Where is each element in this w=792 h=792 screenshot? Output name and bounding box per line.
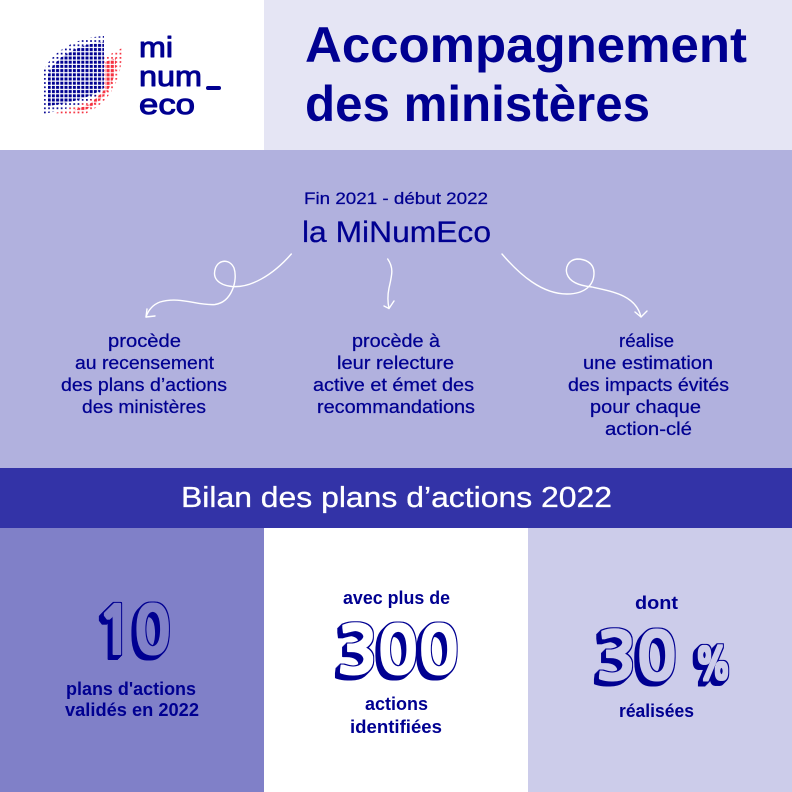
heading: la MiNumEco: la MiNumEco <box>302 216 491 249</box>
icon: dotted leaf <box>43 36 122 114</box>
caption: avec plus de: avec plus de <box>343 588 450 608</box>
arrow: middle <box>384 259 394 308</box>
caption: actions identifiées: identifiées <box>350 717 442 737</box>
date line: Fin 2021 - début 2022 <box>304 189 488 208</box>
panel: process background <box>0 150 792 468</box>
panel: results band <box>0 468 792 528</box>
panel: 10 plans background <box>0 528 264 792</box>
logo wordmark: num <box>139 61 202 93</box>
number: percent sign: % <box>695 643 731 687</box>
number: 300: 300 <box>337 618 459 684</box>
logo: MiNumEco <box>43 32 221 121</box>
text block: census <box>61 331 227 417</box>
caption: actions identifiées <box>350 694 442 737</box>
logo wordmark: mi <box>139 32 173 64</box>
text block: estimation: des impacts évités <box>568 375 729 395</box>
number: 30: 30 <box>596 624 677 690</box>
caption: plans d'actions: plans d'actions <box>66 679 196 699</box>
arrow: right <box>502 254 647 317</box>
logo wordmark <box>139 32 221 121</box>
text block: census: des plans d’actions <box>61 375 227 395</box>
panel: 300 actions background <box>264 528 528 792</box>
panel: 30 percent background <box>528 528 792 792</box>
text block: review: leur relecture <box>337 353 454 373</box>
caption: actions identifiées: actions <box>365 694 428 714</box>
text block: estimation: réalise <box>619 331 674 351</box>
title: Accompagnement <box>305 17 747 73</box>
text block: review <box>313 331 475 417</box>
caption: plans d'actions <box>65 679 199 720</box>
text block: census: au recensement <box>75 353 214 373</box>
text block: census: des ministères <box>82 397 206 417</box>
title: des ministères <box>305 76 650 132</box>
caption: réalisées: réalisées <box>619 701 694 721</box>
caption: dont: dont <box>635 593 678 613</box>
text block: estimation <box>568 331 729 439</box>
text block: estimation: action-clé <box>605 419 692 439</box>
band heading: Bilan des plans d’actions 2022 <box>181 482 612 514</box>
number: 10: 10 <box>97 598 171 664</box>
text block: review: procède à <box>352 331 441 351</box>
panel: title background <box>264 0 792 150</box>
panel: logo background <box>0 0 264 150</box>
text block: census: procède <box>108 331 181 351</box>
title <box>305 17 747 132</box>
text block: review: recommandations <box>317 397 475 417</box>
text block: estimation: pour chaque <box>590 397 701 417</box>
caption: plans d'actions: validés en 2022 <box>65 700 199 720</box>
text block: review: active et émet des <box>313 375 474 395</box>
logo wordmark: eco <box>139 89 195 121</box>
arrow: left <box>146 254 291 317</box>
text block: estimation: une estimation <box>583 353 713 373</box>
